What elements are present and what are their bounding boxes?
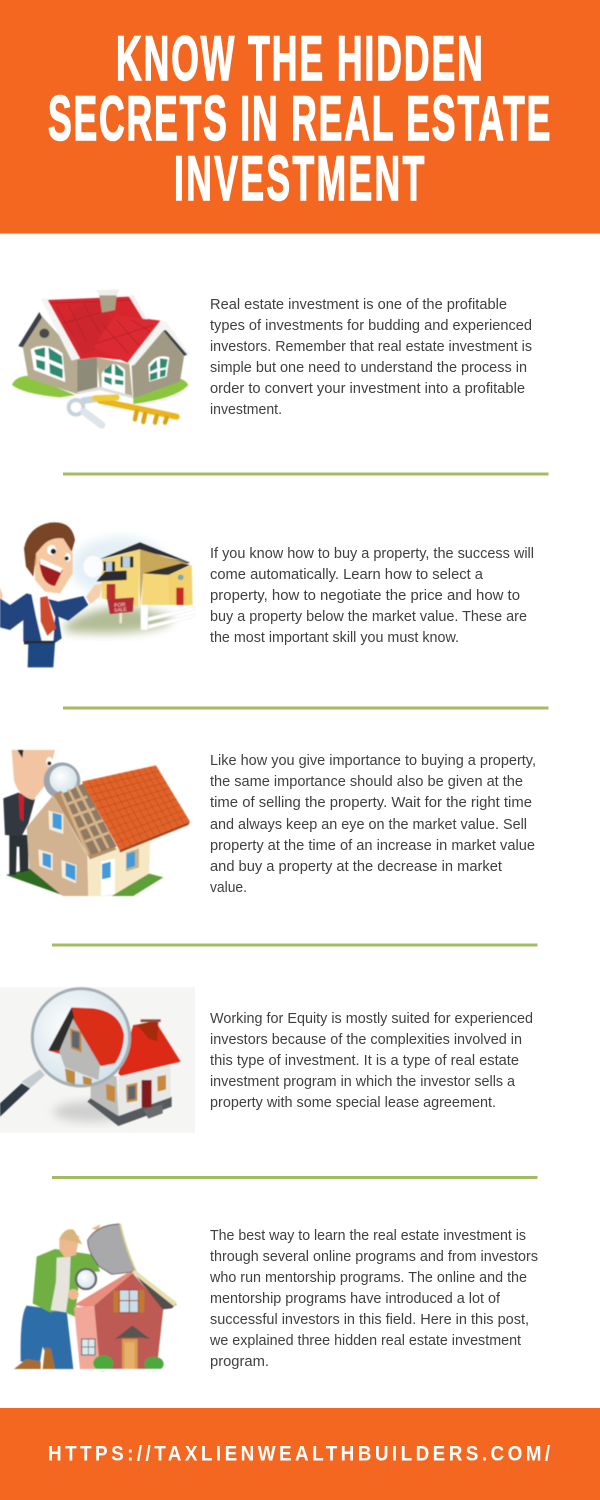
text block 5: who run mentorship programs. The online and the	[209, 1270, 527, 1286]
text block 1: investment.	[210, 402, 282, 418]
text block 3: the same importance should also be given at the	[210, 774, 523, 790]
text block 3: value.	[210, 880, 247, 896]
illustration: house with keys	[12, 289, 191, 425]
illustration: salesman and house for sale: FOR	[114, 602, 126, 609]
text block 1: investors. Remember that real estate investment is	[210, 339, 532, 355]
text block 1: simple but one need to understand the process in	[210, 360, 527, 376]
text block 2	[210, 546, 534, 646]
text block 3: and always keep an eye on the market value. Sell	[210, 817, 527, 833]
footer banner	[0, 1408, 600, 1500]
text block 1	[210, 297, 532, 418]
text block 3	[210, 753, 536, 896]
title: INVESTMENT	[174, 142, 424, 213]
text block 2: come automatically. Learn how to select a	[210, 567, 484, 583]
text block 3: time of selling the property. Wait for the right time	[210, 795, 532, 811]
footer url: HTTPS://TAXLIENWEALTHBUILDERS.COM/	[48, 1443, 551, 1466]
title: SECRETS IN REAL ESTATE	[48, 82, 550, 153]
text block 2: buy a property below the market value. These are	[210, 609, 527, 625]
text block 5: mentorship programs have introduced a lot of	[210, 1291, 501, 1307]
illustration: salesman and house for sale	[0, 522, 195, 667]
text block 5: The best way to learn the real estate investment is	[210, 1228, 526, 1244]
text block 5: successful investors in this field. Here in this post,	[210, 1312, 529, 1328]
title: KNOW THE HIDDEN	[116, 22, 483, 93]
illustration: salesman and house for sale: SALE	[114, 607, 128, 614]
text block 5: program.	[210, 1354, 269, 1370]
title	[48, 22, 550, 213]
illustration: magnifying glass over house	[0, 987, 195, 1133]
text block 2: property, how to negotiate the price and how to	[210, 588, 520, 604]
text block 5	[209, 1228, 538, 1370]
text block 1: types of investments for budding and experienced	[210, 318, 532, 334]
text block 1: order to convert your investment into a profitable	[210, 381, 525, 397]
text block 4: this type of investment. It is a type of real estate	[210, 1053, 519, 1069]
text block 2: the most important skill you must know.	[210, 630, 459, 646]
text block 4: investment program in which the investor sells a	[210, 1074, 516, 1090]
text block 3: and buy a property at the decrease in market	[210, 859, 502, 875]
header banner	[0, 0, 600, 234]
text block 4: property with some special lease agreement.	[210, 1095, 496, 1111]
text block 4: Working for Equity is mostly suited for experienced	[210, 1011, 533, 1027]
illustration: man inspecting house roof	[3, 750, 190, 896]
text block 5: we explained three hidden real estate investment	[209, 1333, 521, 1349]
text block 2: If you know how to buy a property, the success will	[210, 546, 534, 562]
illustration: man lifting roof of house	[14, 1224, 177, 1371]
text block 4	[210, 1011, 533, 1111]
text block 3: property at the time of an increase in market value	[210, 838, 535, 854]
text block 3: Like how you give importance to buying a property,	[210, 753, 536, 769]
text block 1: Real estate investment is one of the profitable	[210, 297, 507, 313]
text block 4: investors because of the complexities involved in	[210, 1032, 522, 1048]
text block 5: through several online programs and from investors	[210, 1249, 538, 1265]
